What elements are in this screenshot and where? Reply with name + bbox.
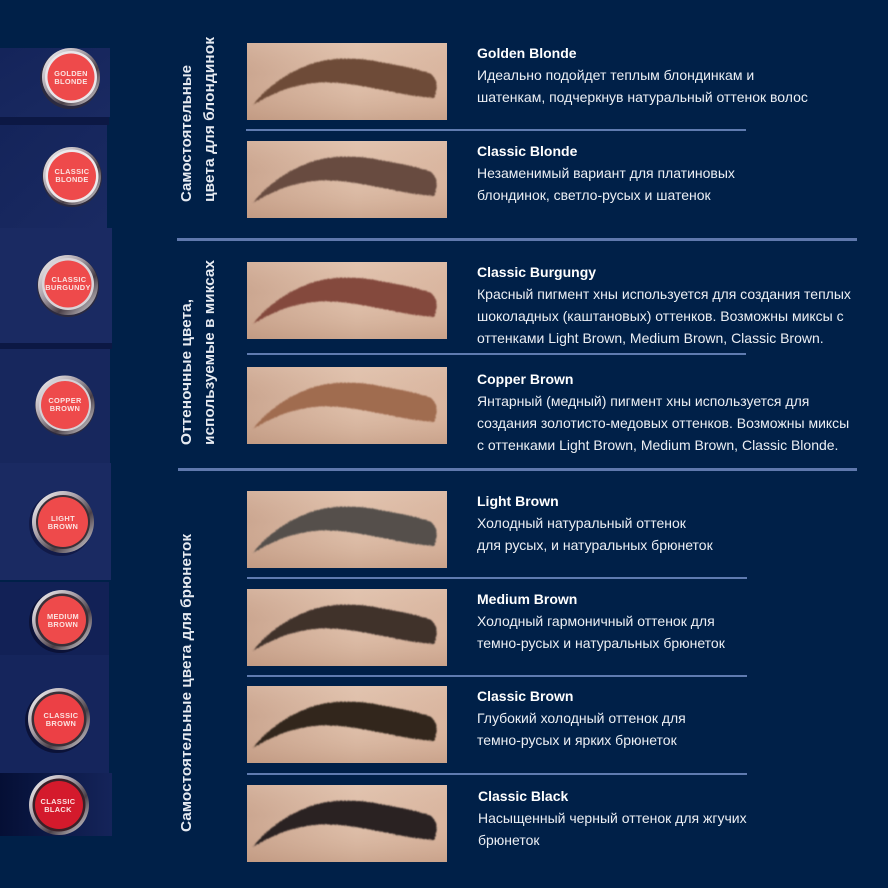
text: Classic Brown: Classic Brown — [477, 688, 573, 704]
box and jar: Classic Blonde — [0, 125, 107, 228]
text: Classic Burgungy: Красный пигмент хны используется для создания теплых — [477, 286, 851, 302]
section label: mix shades: используемые в миксах — [202, 260, 218, 445]
text: Copper Brown: с оттенками Light Brown, Medium Brown, Classic Blonde. — [477, 437, 838, 453]
text: Classic Burgungy: шоколадных (каштановых) оттенков. Возможны миксы с — [477, 308, 844, 324]
section label: mix shades — [179, 260, 218, 445]
text: Golden Blonde: Golden Blonde — [477, 45, 577, 61]
box and jar: Classic Black — [0, 773, 112, 836]
eyebrow photo: Classic Blonde — [247, 141, 447, 218]
text: Copper Brown: создания золотисто-медовых оттенков. Возможны миксы — [477, 415, 849, 431]
box and jar: Golden Blonde: BLONDE — [54, 77, 88, 86]
box and jar: Classic Burgundy: BURGUNDY — [45, 283, 91, 292]
section label: brunette shades: Самостоятельные цвета для брюнеток — [179, 533, 195, 832]
text: Classic Black — [478, 788, 747, 848]
eyebrow photo: Copper Brown — [247, 367, 447, 444]
box and jar: Copper Brown: BROWN — [50, 404, 80, 413]
text: Classic Blonde: блондинок, светло-русых и шатенок — [477, 187, 712, 203]
box and jar: Golden Blonde: GOLDEN — [54, 69, 88, 78]
text: Copper Brown: Янтарный (медный) пигмент хны используется для — [477, 393, 809, 409]
text: Light Brown: для русых, и натуральных брюнеток — [477, 537, 714, 553]
text: Classic Black: Classic Black — [478, 788, 568, 804]
text: Light Brown: Light Brown — [477, 493, 559, 509]
text: Classic Burgungy — [477, 264, 851, 346]
box and jar: Classic Burgundy: CLASSIC — [52, 275, 87, 284]
text: Classic Brown: темно-русых и ярких брюнеток — [477, 732, 678, 748]
box and jar: Classic Brown — [0, 655, 109, 773]
text: Medium Brown — [477, 591, 726, 651]
text: Classic Brown — [477, 688, 686, 748]
text: Classic Blonde: Classic Blonde — [477, 143, 578, 159]
text: Light Brown — [477, 493, 714, 553]
eyebrow photo: Medium Brown — [247, 589, 447, 666]
section label: blonde shades: Самостоятельные — [179, 65, 195, 202]
row: Golden Blonde — [247, 43, 808, 120]
box and jar: Classic Brown: BROWN — [46, 719, 76, 728]
row: Classic Brown — [247, 686, 686, 763]
box and jar: Golden Blonde — [0, 48, 110, 125]
section label: blonde shades — [179, 36, 218, 202]
box and jar: Medium Brown — [0, 582, 109, 655]
text: Medium Brown: темно-русых и натуральных брюнеток — [477, 635, 726, 651]
text: Copper Brown — [477, 371, 849, 453]
box and jar: Light Brown: LIGHT — [51, 514, 75, 523]
box and jar: Classic Blonde: CLASSIC — [55, 167, 90, 176]
box and jar: Classic Blonde: BLONDE — [55, 175, 89, 184]
row: Light Brown — [247, 491, 714, 568]
text: Classic Blonde — [477, 143, 735, 203]
text: Golden Blonde: шатенкам, подчеркнув натуральный оттенок волос — [477, 89, 808, 105]
eyebrow photo: Classic Black — [247, 785, 447, 862]
box and jar: Classic Burgundy — [0, 228, 112, 349]
text: Classic Brown: Глубокий холодный оттенок для — [477, 710, 686, 726]
text: Classic Blonde: Незаменимый вариант для платиновых — [477, 165, 735, 181]
eyebrow photo: Classic Burgungy — [247, 262, 447, 339]
text: Classic Burgungy: оттенками Light Brown, Medium Brown, Classic Brown. — [477, 330, 824, 346]
box and jar: Medium Brown: BROWN — [48, 620, 78, 629]
text: Golden Blonde — [477, 45, 808, 105]
row: Copper Brown — [247, 367, 849, 453]
row: Medium Brown — [247, 589, 726, 666]
box and jar: Medium Brown: MEDIUM — [47, 612, 79, 621]
text: Light Brown: Холодный натуральный оттенок — [477, 515, 687, 531]
section label: mix shades: Оттеночные цвета, — [179, 299, 195, 445]
box and jar: Copper Brown: COPPER — [48, 396, 82, 405]
eyebrow photo: Golden Blonde — [247, 43, 447, 120]
row: Classic Black — [247, 785, 747, 862]
section label: blonde shades: цвета для блондинок — [202, 36, 218, 202]
row: Classic Blonde — [247, 141, 735, 218]
text: Classic Black: брюнеток — [478, 832, 540, 848]
eyebrow photo: Light Brown — [247, 491, 447, 568]
box and jar: Light Brown — [0, 463, 111, 580]
text: Classic Burgungy: Classic Burgungy — [477, 264, 596, 280]
box and jar: Classic Black: CLASSIC — [41, 797, 76, 806]
product column: pigment jars on navy boxes — [0, 48, 112, 836]
box and jar: Light Brown: BROWN — [48, 522, 78, 531]
eyebrow photo: Classic Brown — [247, 686, 447, 763]
box and jar: Classic Black: BLACK — [44, 805, 72, 814]
box and jar: Classic Brown: CLASSIC — [44, 711, 79, 720]
text: Classic Black: Насыщенный черный оттенок для жгучих — [478, 810, 747, 826]
text: Golden Blonde: Идеально подойдет теплым блондинкам и — [477, 67, 754, 83]
box and jar: Copper Brown — [0, 349, 110, 463]
row: Classic Burgungy — [247, 262, 851, 346]
text: Medium Brown: Medium Brown — [477, 591, 577, 607]
text: Copper Brown: Copper Brown — [477, 371, 573, 387]
text: Medium Brown: Холодный гармоничный оттенок для — [477, 613, 715, 629]
